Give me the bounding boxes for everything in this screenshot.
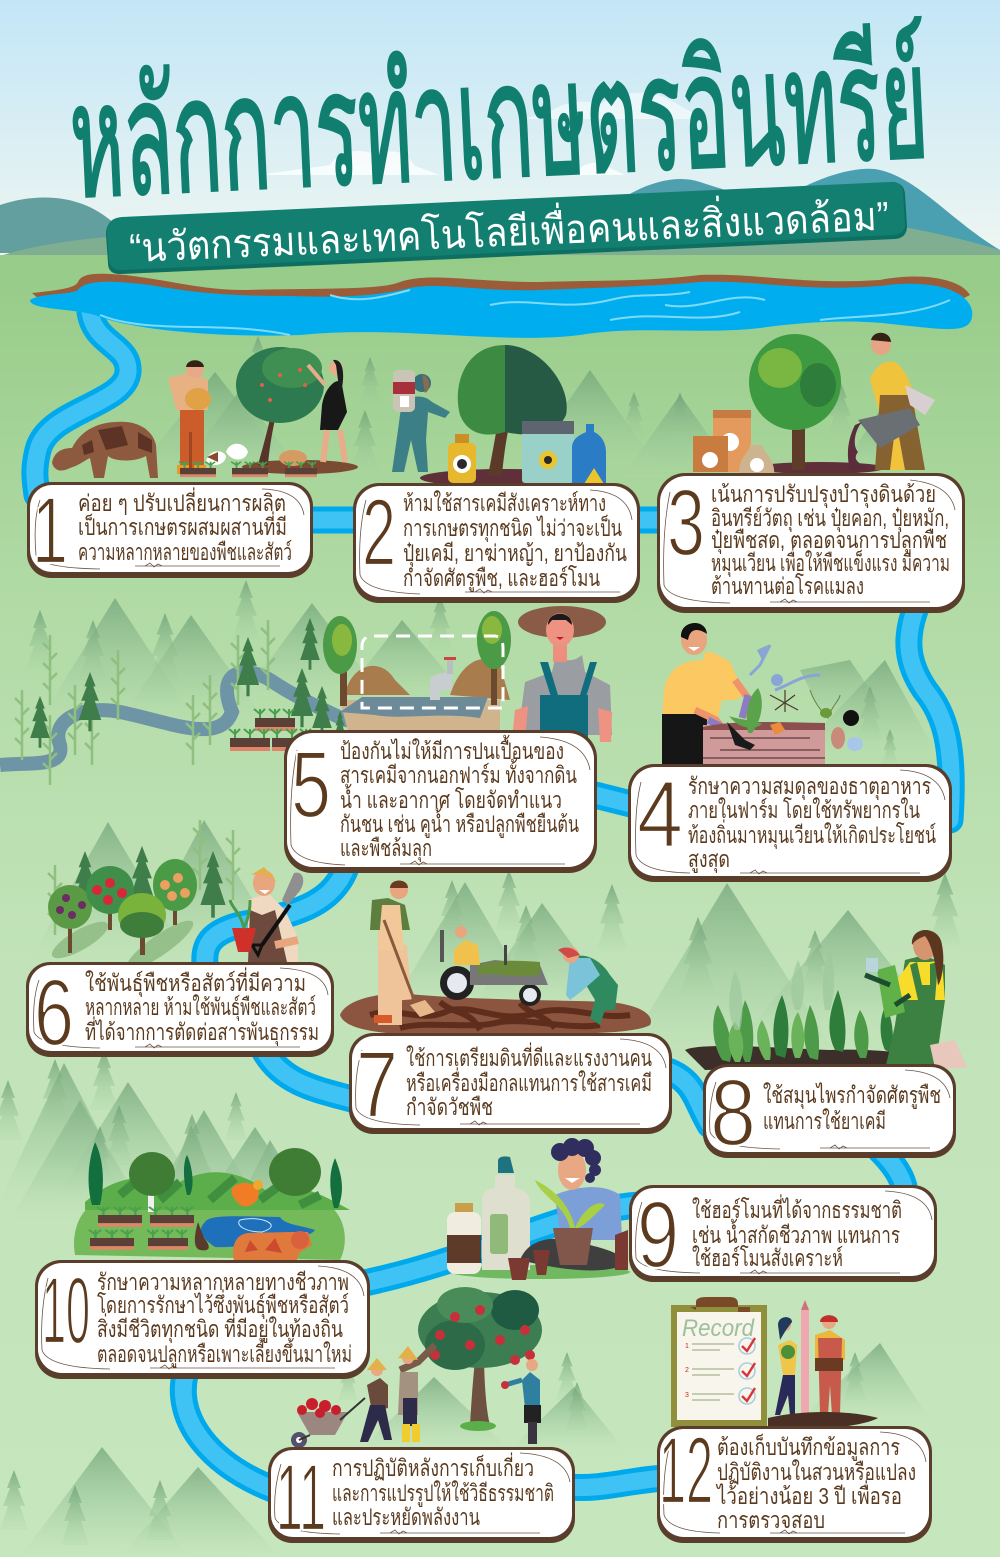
illustration: compost farmer	[662, 623, 880, 766]
card 4: 4	[637, 762, 683, 868]
illustration: harvest	[291, 1287, 542, 1448]
card 4: ภายในฟาร์ม โดยใช้ทรัพยากรใน	[688, 797, 920, 823]
card 12: ไว้อย่างน้อย 3 ปี เพื่อรอ	[715, 1480, 902, 1509]
card 7: 7	[356, 1032, 398, 1138]
card 9: ใช้ฮอร์โมนสังเคราะห์	[692, 1245, 843, 1271]
card 5: น้ำ และอากาศ โดยจัดทำแนว	[340, 784, 562, 813]
card 10: รักษาความหลากหลายทางชีวภาพ	[97, 1269, 349, 1295]
card 3: ต้านทานต่อโรคแมลง	[711, 573, 864, 599]
card 7: ใช้การเตรียมดินที่ดีและแรงงานคน	[406, 1042, 652, 1071]
illustration: buffer zone landscape	[0, 606, 612, 785]
illustration: herbs	[685, 930, 967, 1070]
card 2: กำจัดศัตรูพืช, และฮอร์โมน	[403, 565, 600, 592]
card 10: สิ่งมีชีวิตทุกชนิด ที่มีอยู่ในท้องถิ่น	[97, 1313, 343, 1343]
card 1: 1	[32, 478, 68, 584]
card 2: ห้ามใช้สารเคมีสังเคราะห์ทาง	[403, 490, 606, 516]
card 4: สูงสุด	[688, 846, 730, 873]
card 8: ใช้สมุนไพรกำจัดศัตรูพืช	[763, 1082, 941, 1109]
illustration: soil improvement	[693, 333, 935, 475]
card 7: หรือเครื่องมือกลแทนการใช้สารเคมี	[406, 1067, 652, 1096]
card 12: 12	[659, 1418, 713, 1524]
card 3: เน้นการปรับปรุงบำรุงดินด้วย	[711, 481, 936, 508]
card 9	[629, 1182, 937, 1288]
clouds	[258, 93, 704, 175]
illustration: record keeping: 1	[685, 1343, 689, 1350]
card 5	[284, 730, 597, 873]
mountains background	[0, 370, 950, 1557]
card 8: แทนการใช้ยาเคมี	[763, 1108, 886, 1134]
card 1: เป็นการเกษตรผสมผสานที่มี	[78, 511, 287, 540]
illustration: soil preparation	[340, 880, 651, 1036]
title: หลักการทำเกษตรอินทรีย์	[66, 14, 932, 232]
card 5: ป้องกันไม่ให้มีการปนเปื้อนของ	[340, 735, 564, 764]
card 3	[657, 470, 965, 613]
card 12: ปฏิบัติงานในสวนหรือแปลง	[717, 1459, 916, 1485]
subtitle banner: “นวัตกรรมและเทคโนโลยีเพื่อคนและสิ่งแวดล้อม”	[128, 189, 890, 271]
distant hills	[0, 169, 1000, 256]
card 6: หลากหลาย ห้ามใช้พันธุ์พืชและสัตว์	[85, 994, 316, 1021]
card 5: 5	[291, 732, 331, 838]
card 9: ใช้ฮอร์โมนที่ได้จากธรรมชาติ	[692, 1194, 902, 1223]
card 6: 6	[34, 960, 74, 1066]
card 12: ต้องเก็บบันทึกข้อมูลการ	[717, 1432, 900, 1461]
top river lake	[30, 274, 972, 338]
card 10	[35, 1258, 370, 1379]
card 12	[657, 1418, 932, 1543]
card 7: กำจัดวัชพืช	[406, 1094, 493, 1120]
illustration: record keeping: 3	[685, 1392, 689, 1399]
illustration: record keeping: Record	[682, 1315, 755, 1342]
card 10: โดยการรักษาไว้ซึ่งพันธุ์พืชหรือสัตว์	[97, 1289, 349, 1319]
card 11: 11	[276, 1445, 326, 1551]
card 6	[26, 960, 334, 1066]
card 4: รักษาความสมดุลของธาตุอาหาร	[688, 773, 931, 800]
card 10: ตลอดจนปลูกหรือเพาะเลี้ยงขึ้นมาใหม่	[97, 1338, 352, 1368]
card 3: 3	[667, 470, 705, 576]
winding river	[35, 312, 951, 1490]
illustration: natural hormone	[447, 1138, 630, 1280]
pine trees background	[0, 336, 962, 1545]
sky background	[0, 0, 1000, 256]
card 10: 10	[42, 1258, 90, 1364]
illustration: fruit diversity	[47, 820, 303, 976]
card 11: และประหยัดพลังงาน	[332, 1504, 480, 1530]
card 4	[628, 762, 952, 882]
illustration: record keeping	[671, 1297, 878, 1430]
card 2: การเกษตรทุกชนิด ไม่ว่าจะเป็น	[403, 513, 622, 542]
card 1	[27, 478, 313, 584]
illustration: chemical ban	[392, 345, 606, 487]
card 12: การตรวจสอบ	[717, 1507, 825, 1533]
card 5: สารเคมีจากนอกฟาร์ม ทั้งจากดิน	[340, 759, 577, 788]
card 8	[703, 1060, 956, 1166]
card 7	[349, 1032, 672, 1138]
card 1: ความหลากหลายของพืชและสัตว์	[78, 539, 292, 565]
card 1: ค่อย ๆ ปรับเปลี่ยนการผลิต	[78, 487, 286, 516]
illustration: mixed farming	[52, 347, 358, 478]
card 2: 2	[362, 480, 396, 586]
card 2	[353, 480, 640, 603]
card 11: และการแปรรูปให้ใช้วิธีธรรมชาติ	[332, 1480, 554, 1507]
illustration: record keeping: 2	[685, 1367, 689, 1374]
card 8: 8	[710, 1060, 756, 1166]
card 5: กันชน เช่น คูน้ำ หรือปลูกพืชยืนต้น	[340, 808, 579, 838]
card 9: เช่น น้ำสกัดชีวภาพ แทนการ	[692, 1219, 900, 1248]
card 2: ปุ๋ยเคมี, ยาฆ่าหญ้า, ยาป้องกัน	[403, 540, 627, 567]
card 6: ใช้พันธุ์พืชหรือสัตว์ที่มีความ	[85, 967, 306, 997]
card 11: การปฏิบัติหลังการเก็บเกี่ยว	[332, 1452, 534, 1481]
card 9: 9	[637, 1182, 679, 1288]
card 5: และพืชล้มลุก	[340, 835, 432, 862]
card 6: ที่ได้จากการตัดต่อสารพันธุกรรม	[85, 1016, 319, 1046]
card 11	[268, 1445, 575, 1551]
illustration: biodiversity farm	[74, 1142, 350, 1262]
